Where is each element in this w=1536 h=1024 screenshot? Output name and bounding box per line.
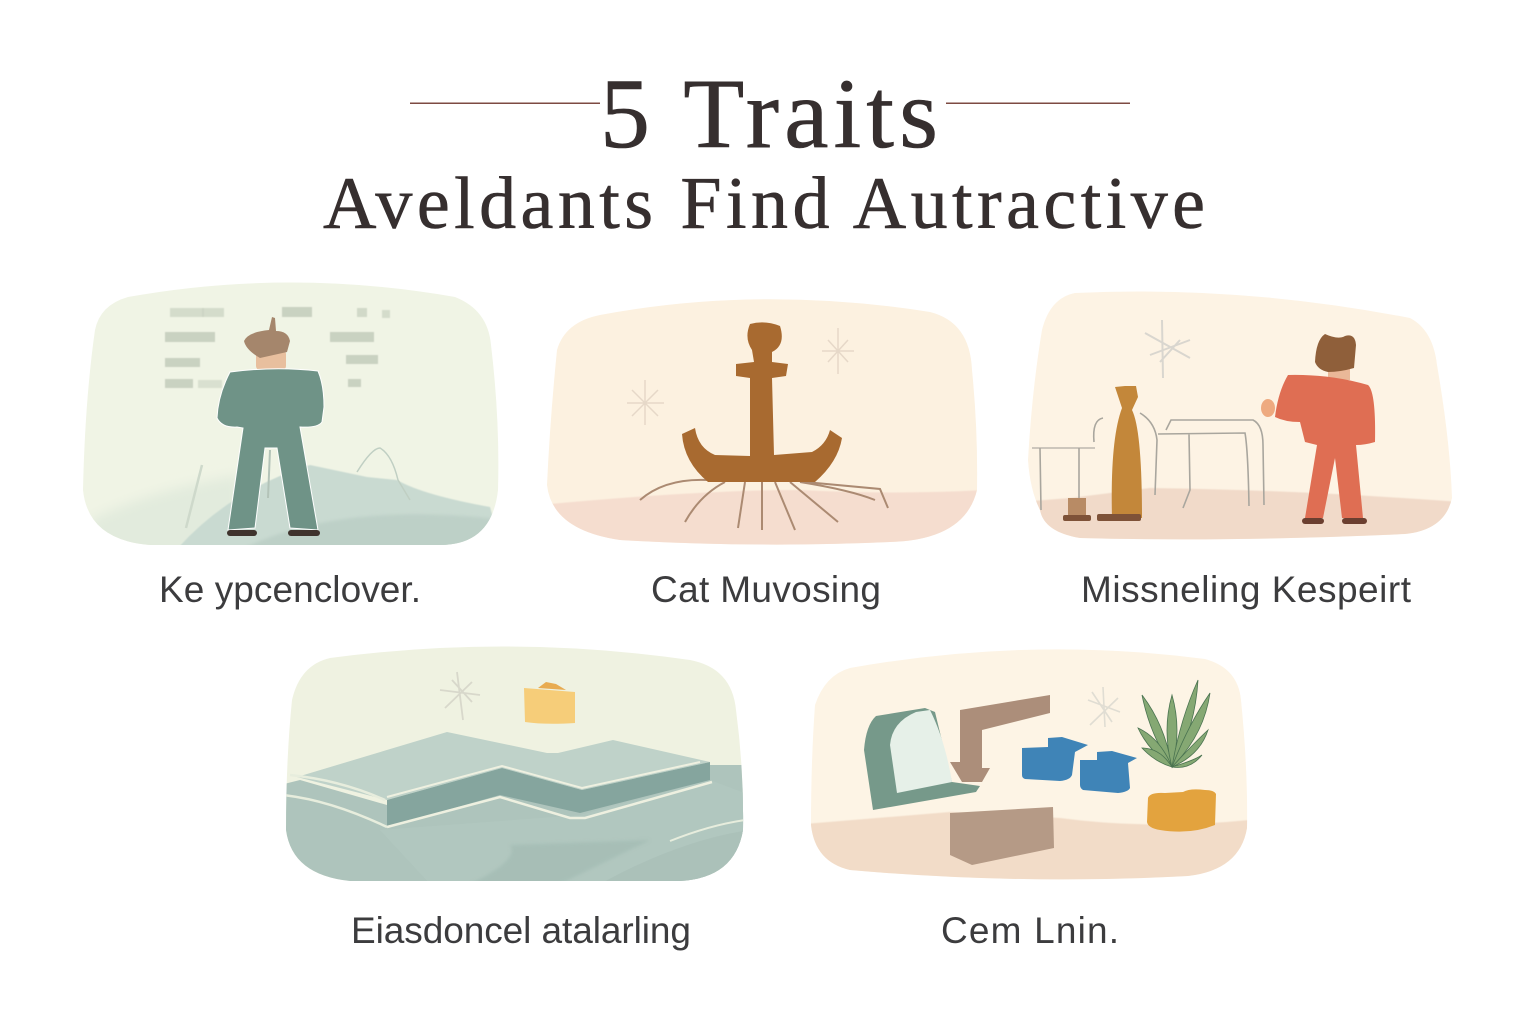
figure in green suit xyxy=(217,317,324,536)
panel: Missneling Kespeirt xyxy=(1020,291,1460,545)
label 3: Missneling Kespeirt xyxy=(1081,569,1412,610)
panel background xyxy=(83,282,498,545)
panel background xyxy=(547,299,977,545)
sparkle xyxy=(440,672,480,720)
green chair xyxy=(864,708,980,810)
sparkles xyxy=(627,328,854,425)
label 4: Eiasdoncel atalarling xyxy=(351,910,691,951)
roots xyxy=(640,480,888,530)
panel: Eiasdoncel atalarling xyxy=(280,646,750,884)
panel: Cat Muvosing xyxy=(540,299,985,550)
label 5: Cem Lnin. xyxy=(941,910,1119,951)
plant xyxy=(1138,680,1210,768)
sparkle xyxy=(1145,320,1190,378)
blurred text marks xyxy=(165,307,390,388)
title line two: Aveldants Find Autractive xyxy=(323,163,1205,245)
floor xyxy=(805,812,1250,885)
brown figure xyxy=(1063,386,1142,521)
panel: Ke ypcenclover xyxy=(83,282,505,560)
panel: Cem Lnin xyxy=(805,649,1250,885)
sparkle xyxy=(1088,687,1120,727)
yellow box xyxy=(524,682,575,724)
panel background xyxy=(286,646,743,881)
layered landscape xyxy=(280,732,750,884)
title xyxy=(323,58,1205,245)
label 1: Ke ypcenclover. xyxy=(159,569,421,610)
blue boxes xyxy=(1022,737,1137,793)
title rule right xyxy=(946,102,1130,104)
panel background xyxy=(811,649,1247,879)
title line one: 5 Traits xyxy=(600,58,938,169)
panel background xyxy=(1028,291,1452,539)
mist hills xyxy=(95,447,492,545)
anchor xyxy=(682,322,842,482)
table outlines xyxy=(1032,413,1264,510)
brown crate xyxy=(950,807,1054,865)
title rule left xyxy=(410,102,600,104)
floor xyxy=(1036,488,1451,540)
brown frame xyxy=(950,695,1050,782)
label 2: Cat Muvosing xyxy=(651,569,881,610)
red figure xyxy=(1261,334,1375,524)
ground xyxy=(552,490,977,545)
yellow pot xyxy=(1147,789,1216,832)
